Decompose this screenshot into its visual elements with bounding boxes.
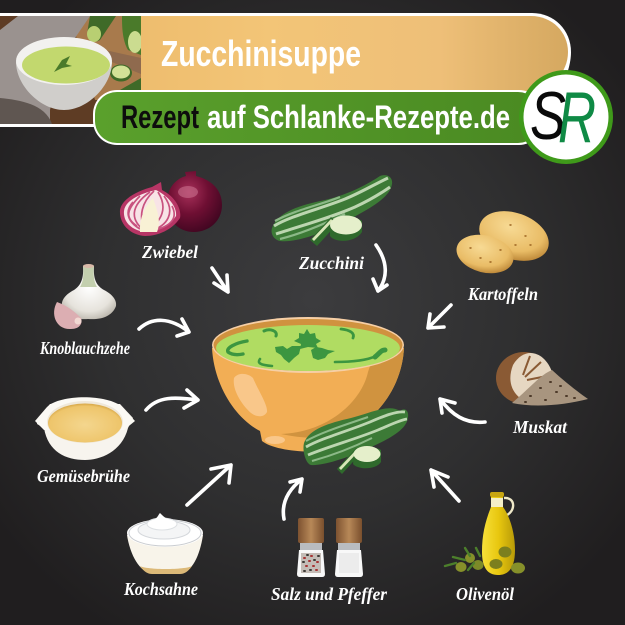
icon: potatoes [452,202,556,279]
arrow: from potatoes [428,305,451,328]
logo SR: R [558,78,596,158]
label: Muskat: Muskat [512,417,568,437]
icon: broth bowl [35,397,135,460]
photo: zucchini soup [0,13,142,126]
label: Kochsahne: Kochsahne [123,579,198,599]
icon: olive oil [445,492,525,575]
gold title fill [141,16,568,91]
label: Salz und Pfeffer: Salz und Pfeffer [271,584,388,604]
arrow: from nutmeg [440,399,485,422]
heading: Rezept: Rezept [121,99,199,135]
arrow: from onion [212,268,228,292]
photo frame bottom line [0,124,100,127]
arrow: from garlic [139,319,189,336]
arrow: from cream [187,465,231,505]
zucchini slices [310,216,362,246]
arrows [139,245,485,519]
green url pill [93,90,543,145]
header banner [0,13,571,145]
label: Gemüsebrühe: Gemüsebrühe [37,466,130,486]
soup bowl [212,317,404,452]
heading: recipe name: Zucchinisuppe [161,33,361,74]
logo SR: S [530,78,566,154]
soup swirls [228,329,385,366]
label: Zwiebel: Zwiebel [141,242,198,262]
icon: onions [120,171,222,236]
icon: nutmeg [496,352,588,406]
green pill fill [95,92,540,143]
arrow: from salt and pepper [283,479,302,519]
label: Olivenöl: Olivenöl [456,584,514,604]
arrow: from olive oil [431,470,459,501]
icon: pepper mill [297,518,325,577]
label: Knoblauchzehe: Knoblauchzehe [39,338,130,358]
logo SR [519,70,613,164]
icon: zucchini [272,175,392,246]
arrow: from zucchini [373,245,387,291]
icon: sour cream bowl [127,513,203,574]
arrow: from broth [146,390,198,410]
icon: zucchini on bowl [303,408,408,474]
gold title band [0,13,571,108]
label: Zucchini: Zucchini [298,253,364,273]
label: Kartoffeln: Kartoffeln [467,284,538,304]
soup herbs [275,329,335,363]
heading: site name: auf Schlanke-Rezepte.de [207,99,510,135]
icon: garlic [54,264,116,329]
icon: salt mill [335,518,363,577]
